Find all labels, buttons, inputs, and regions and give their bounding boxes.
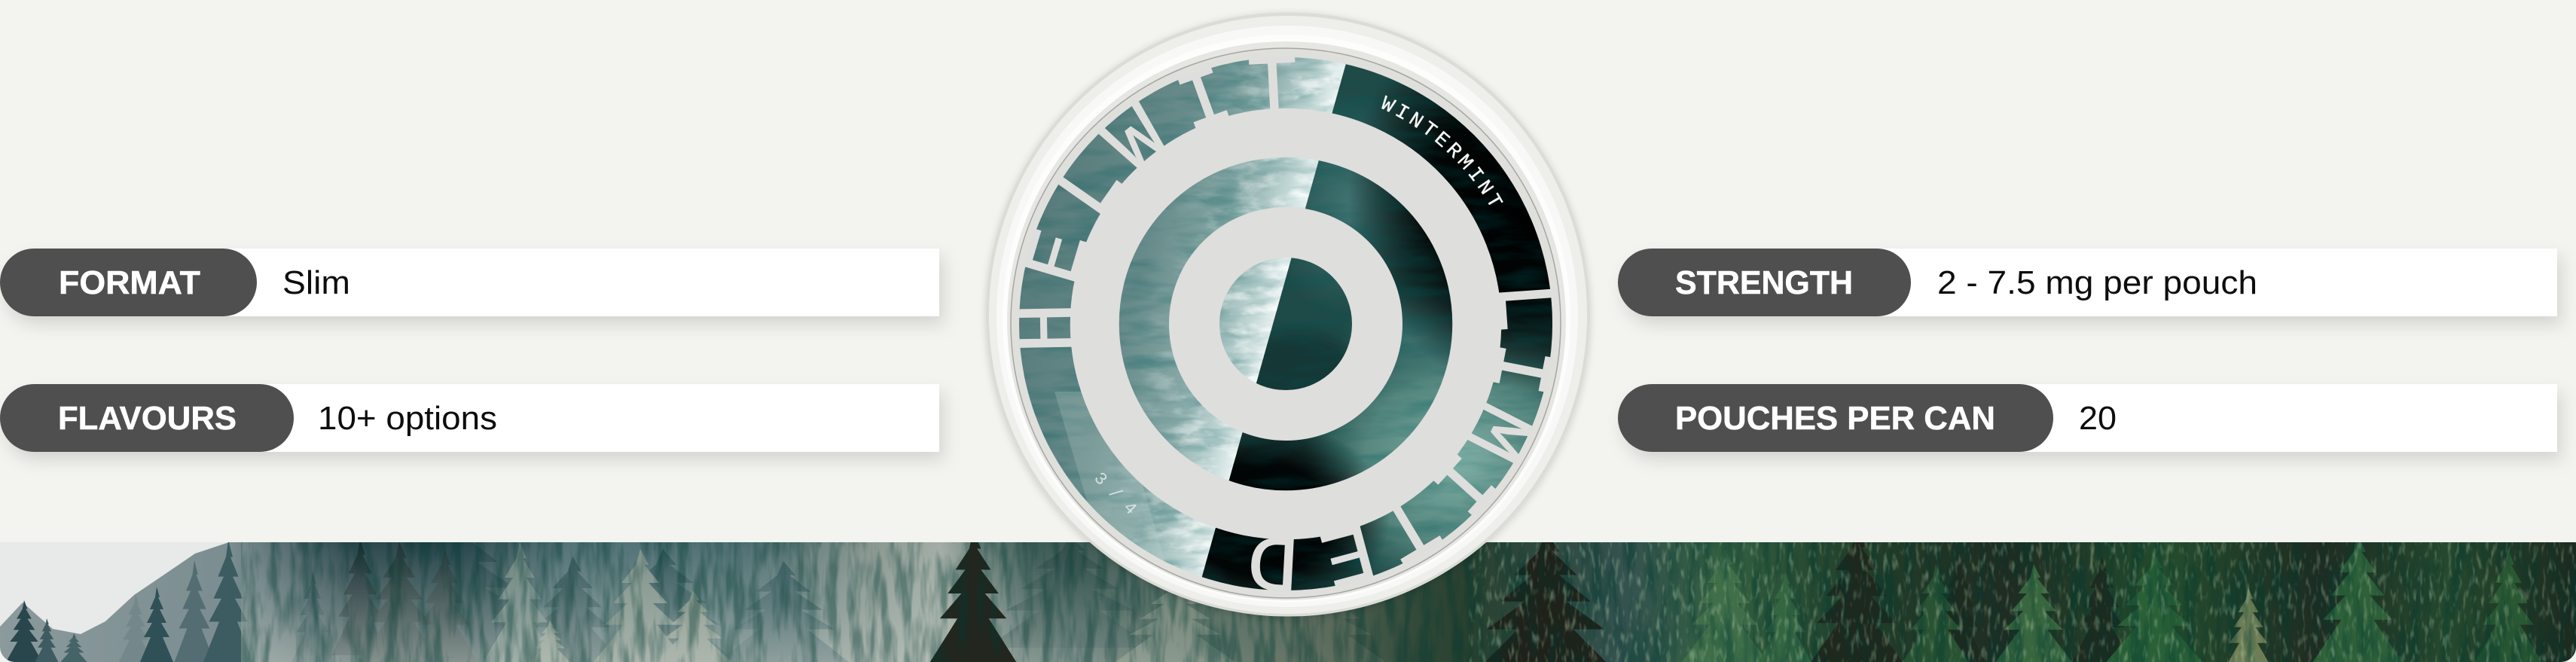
label pill [1618,249,1911,316]
brand wordmark: HELWIT: T [1245,42,1302,136]
label: pouches per can: POUCHES PER CAN [1675,401,1995,437]
brand wordmark: LIMITED: M [1443,387,1547,474]
brand wordmark: HELWIT: E [1009,219,1111,294]
brand wordmark: LIMITED: E [1310,501,1384,602]
value bar [1652,249,2557,316]
value bar [1652,384,2557,452]
value bar [34,249,939,316]
grey ring: outer [1094,133,1477,515]
label pill [0,384,294,452]
spec row: pouches per can [1618,384,2557,452]
value: 20: 20 [2079,401,2117,437]
brand wordmark: LIMITED: D [1245,512,1302,606]
brand wordmark: LIMITED: L [1473,279,1567,337]
grey ring: inner [1195,232,1377,416]
spec row: format [0,249,939,316]
value: mg per pouch: 2 - 7.5 mg per pouch [1937,265,2257,301]
brand wordmark: LIMITED: I [1467,334,1566,403]
brand wordmark: LIMITED: I [1410,432,1512,531]
flavour name on arc: WINTERMINT [1381,95,1503,205]
forest photo strip [0,542,2576,662]
label: flavours: FLAVOURS [58,401,237,437]
label: format: FORMAT [59,265,200,301]
brand wordmark: HELWIT: I [1165,51,1245,154]
label pill [1618,384,2053,452]
brand wordmark: HELWIT [1005,42,1302,355]
value bar [34,384,939,452]
product can [983,11,1593,618]
strength indicator 3/4: 3 / 4 [1090,468,1140,519]
spec row: flavours [0,384,939,452]
value: options: 10+ options [318,401,497,437]
brand wordmark: HELWIT: L [1041,142,1145,236]
label pill [0,249,257,316]
can rim [986,12,1590,616]
spec row: strength [1618,249,2557,316]
brand wordmark: LIMITED [1245,279,1567,606]
brand wordmark: HELWIT: W [1089,89,1187,193]
label: strength: STRENGTH [1675,265,1853,301]
brand wordmark: HELWIT: H [1005,301,1096,355]
value: slim: Slim [282,265,350,301]
lid water artwork [1019,57,1552,590]
brand wordmark: LIMITED: T [1362,474,1452,578]
